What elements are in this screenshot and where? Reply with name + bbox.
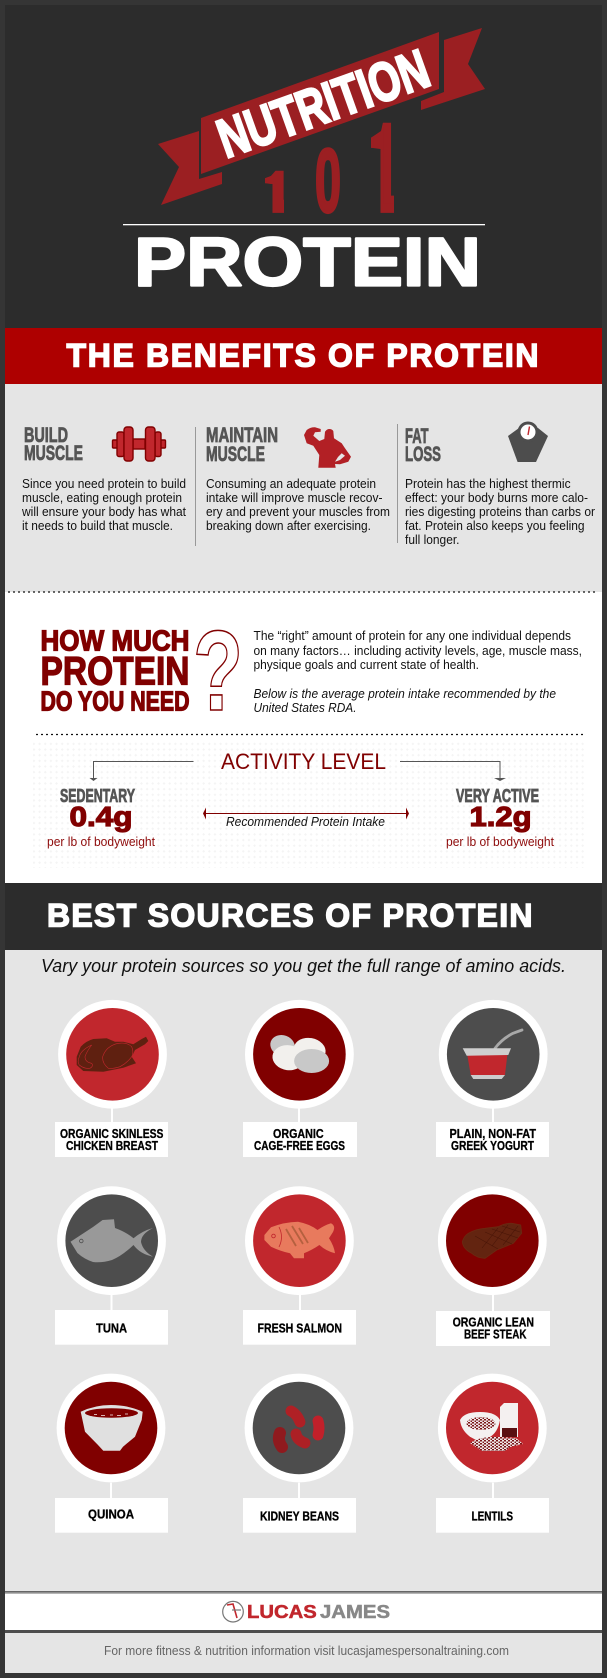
section banner: best sources of protein: BEST SOURCES OF PROTEIN (47, 898, 532, 934)
source: steak: BEEF STEAK (464, 1328, 526, 1342)
heading: activity level: ACTIVITY LEVEL (221, 749, 386, 774)
source: tuna: TUNA (96, 1322, 127, 1336)
icon: question mark: ? (193, 608, 243, 735)
source: kidney beans: KIDNEY BEANS (260, 1509, 339, 1523)
benefit: build muscle: MUSCLE (24, 442, 83, 465)
source: eggs: CAGE-FREE EGGS (254, 1139, 345, 1153)
benefit: fat loss: ries digesting proteins than carbs or (405, 505, 595, 519)
arrow: left (90, 762, 194, 781)
benefit: build muscle: BUILD (24, 424, 68, 447)
arrow: recommended protein intake (203, 808, 409, 829)
benefit: build muscle: will ensure your body has what (21, 505, 186, 519)
heading: how much protein do you need: PROTEIN (40, 650, 190, 694)
logo wordmark (247, 1602, 390, 1622)
panel: header (5, 5, 602, 328)
icon: quinoa bowl (81, 1405, 143, 1451)
benefit: maintain muscle: MUSCLE (206, 443, 265, 466)
benefit: build muscle: muscle, eating enough protein (22, 491, 182, 505)
source: quinoa (55, 1374, 168, 1533)
panel: how much protein (5, 592, 602, 883)
stat: very active (446, 786, 554, 849)
source: steak (436, 1186, 550, 1346)
source: salmon (243, 1186, 356, 1345)
benefit: maintain muscle (206, 424, 390, 533)
text block: intro: Below is the average protein intake recommended by the (254, 687, 556, 701)
icon: lentils (460, 1403, 523, 1451)
stat: very active: per lb of bodyweight (446, 835, 554, 849)
benefit: maintain muscle: MAINTAIN (206, 424, 278, 447)
icon: yogurt (463, 1030, 522, 1079)
source: yogurt: PLAIN, NON-FAT (450, 1127, 536, 1141)
activity level chart (33, 740, 585, 868)
source: chicken: CHICKEN BREAST (66, 1139, 158, 1153)
source: quinoa: QUINOA (88, 1508, 134, 1522)
footer: website note: For more fitness & nutrition information visit lucasjamespersonaltraining.com (104, 1644, 509, 1658)
icon: scale (508, 422, 548, 462)
title: 101: 0 (315, 132, 341, 232)
logo wordmark: JAMES (320, 1602, 390, 1622)
subheading: Vary your protein sources so you get the full range of amino acids. (41, 956, 566, 976)
benefit: fat loss: fat. Protein also keeps you feeling (405, 519, 585, 533)
heading: how much protein do you need: HOW MUCH (40, 626, 190, 658)
source: tuna (55, 1186, 168, 1345)
stat: very active: 1.2g (470, 801, 532, 832)
icon: dumbbell (112, 427, 166, 461)
text block: intro: on many factors… including activity levels, age, muscle mass, (254, 644, 582, 658)
title: protein: PROTEIN (134, 224, 481, 300)
logo wordmark: LUCAS (247, 1602, 317, 1622)
title: 101: 1 (254, 158, 288, 226)
heading: how much protein do you need (40, 626, 190, 716)
panel: benefits (5, 384, 602, 592)
source: chicken: ORGANIC SKINLESS (60, 1127, 163, 1141)
icon: eggs (267, 1032, 329, 1073)
title: nutrition: NUTRITION (209, 37, 437, 170)
footer: logo bar (5, 1591, 602, 1633)
arrow: right (400, 762, 506, 781)
benefit: build muscle (21, 424, 186, 533)
benefit: fat loss: full longer. (405, 533, 460, 547)
benefit: fat loss: effect: your body burns more calo- (405, 491, 588, 505)
benefit: maintain muscle: Consuming an adequate protein (206, 477, 376, 491)
benefit: fat loss: LOSS (405, 443, 441, 466)
arrow: recommended protein intake: Recommended Protein Intake (226, 815, 385, 829)
source: eggs (243, 1000, 357, 1157)
benefit: fat loss (405, 422, 595, 547)
footer: website note (5, 1633, 602, 1673)
icon: kidney beans (279, 1411, 319, 1447)
stat: sedentary: per lb of bodyweight (47, 835, 155, 849)
icon: tuna (70, 1219, 153, 1262)
icon: steak (462, 1223, 522, 1258)
title: 101 (265, 122, 394, 214)
icon: salmon (264, 1222, 335, 1258)
benefit: maintain muscle: intake will improve muscle recov- (206, 491, 382, 505)
text block: intro (254, 629, 582, 715)
panel: protein sources (5, 950, 602, 1591)
text block: intro: United States RDA. (254, 701, 356, 715)
source: salmon: FRESH SALMON (258, 1322, 342, 1336)
source: yogurt: GREEK YOGURT (451, 1139, 534, 1153)
benefit: build muscle: Since you need protein to build (22, 477, 186, 491)
source: lentils: LENTILS (472, 1509, 513, 1523)
source: eggs: ORGANIC (273, 1127, 324, 1141)
source: kidney beans (243, 1374, 356, 1533)
benefit: fat loss: Protein has the highest thermic (405, 477, 571, 491)
title: 101: 1 (338, 94, 411, 241)
stat: sedentary: SEDENTARY (60, 786, 135, 806)
stat: sedentary (47, 786, 155, 849)
source: steak: ORGANIC LEAN (453, 1316, 534, 1330)
heading: how much protein do you need: DO YOU NEED (40, 686, 190, 716)
source: lentils (436, 1374, 549, 1533)
benefit: build muscle: it needs to build that muscle. (22, 519, 173, 533)
icon: logo mark (223, 1601, 243, 1622)
benefit: maintain muscle: breaking down after exercising. (206, 519, 371, 533)
ribbon banner (158, 28, 485, 205)
benefit: maintain muscle: ery and prevent your muscles from (206, 505, 390, 519)
stat: sedentary: 0.4g (70, 801, 132, 832)
icon: chicken (77, 1037, 148, 1072)
source: yogurt (436, 1000, 549, 1157)
benefit: fat loss: FAT (405, 425, 429, 448)
text block: intro: physique goals and current state of health. (254, 658, 479, 672)
section banner: best sources of protein (5, 883, 602, 950)
stat: very active: VERY ACTIVE (456, 786, 539, 806)
section banner: the benefits of protein: THE BENEFITS OF PROTEIN (66, 338, 538, 374)
icon: muscleman (304, 427, 351, 468)
section banner: the benefits of protein (5, 328, 602, 384)
source: chicken (55, 1000, 168, 1157)
text block: intro: The “right” amount of protein for any one individual depends (254, 629, 571, 643)
